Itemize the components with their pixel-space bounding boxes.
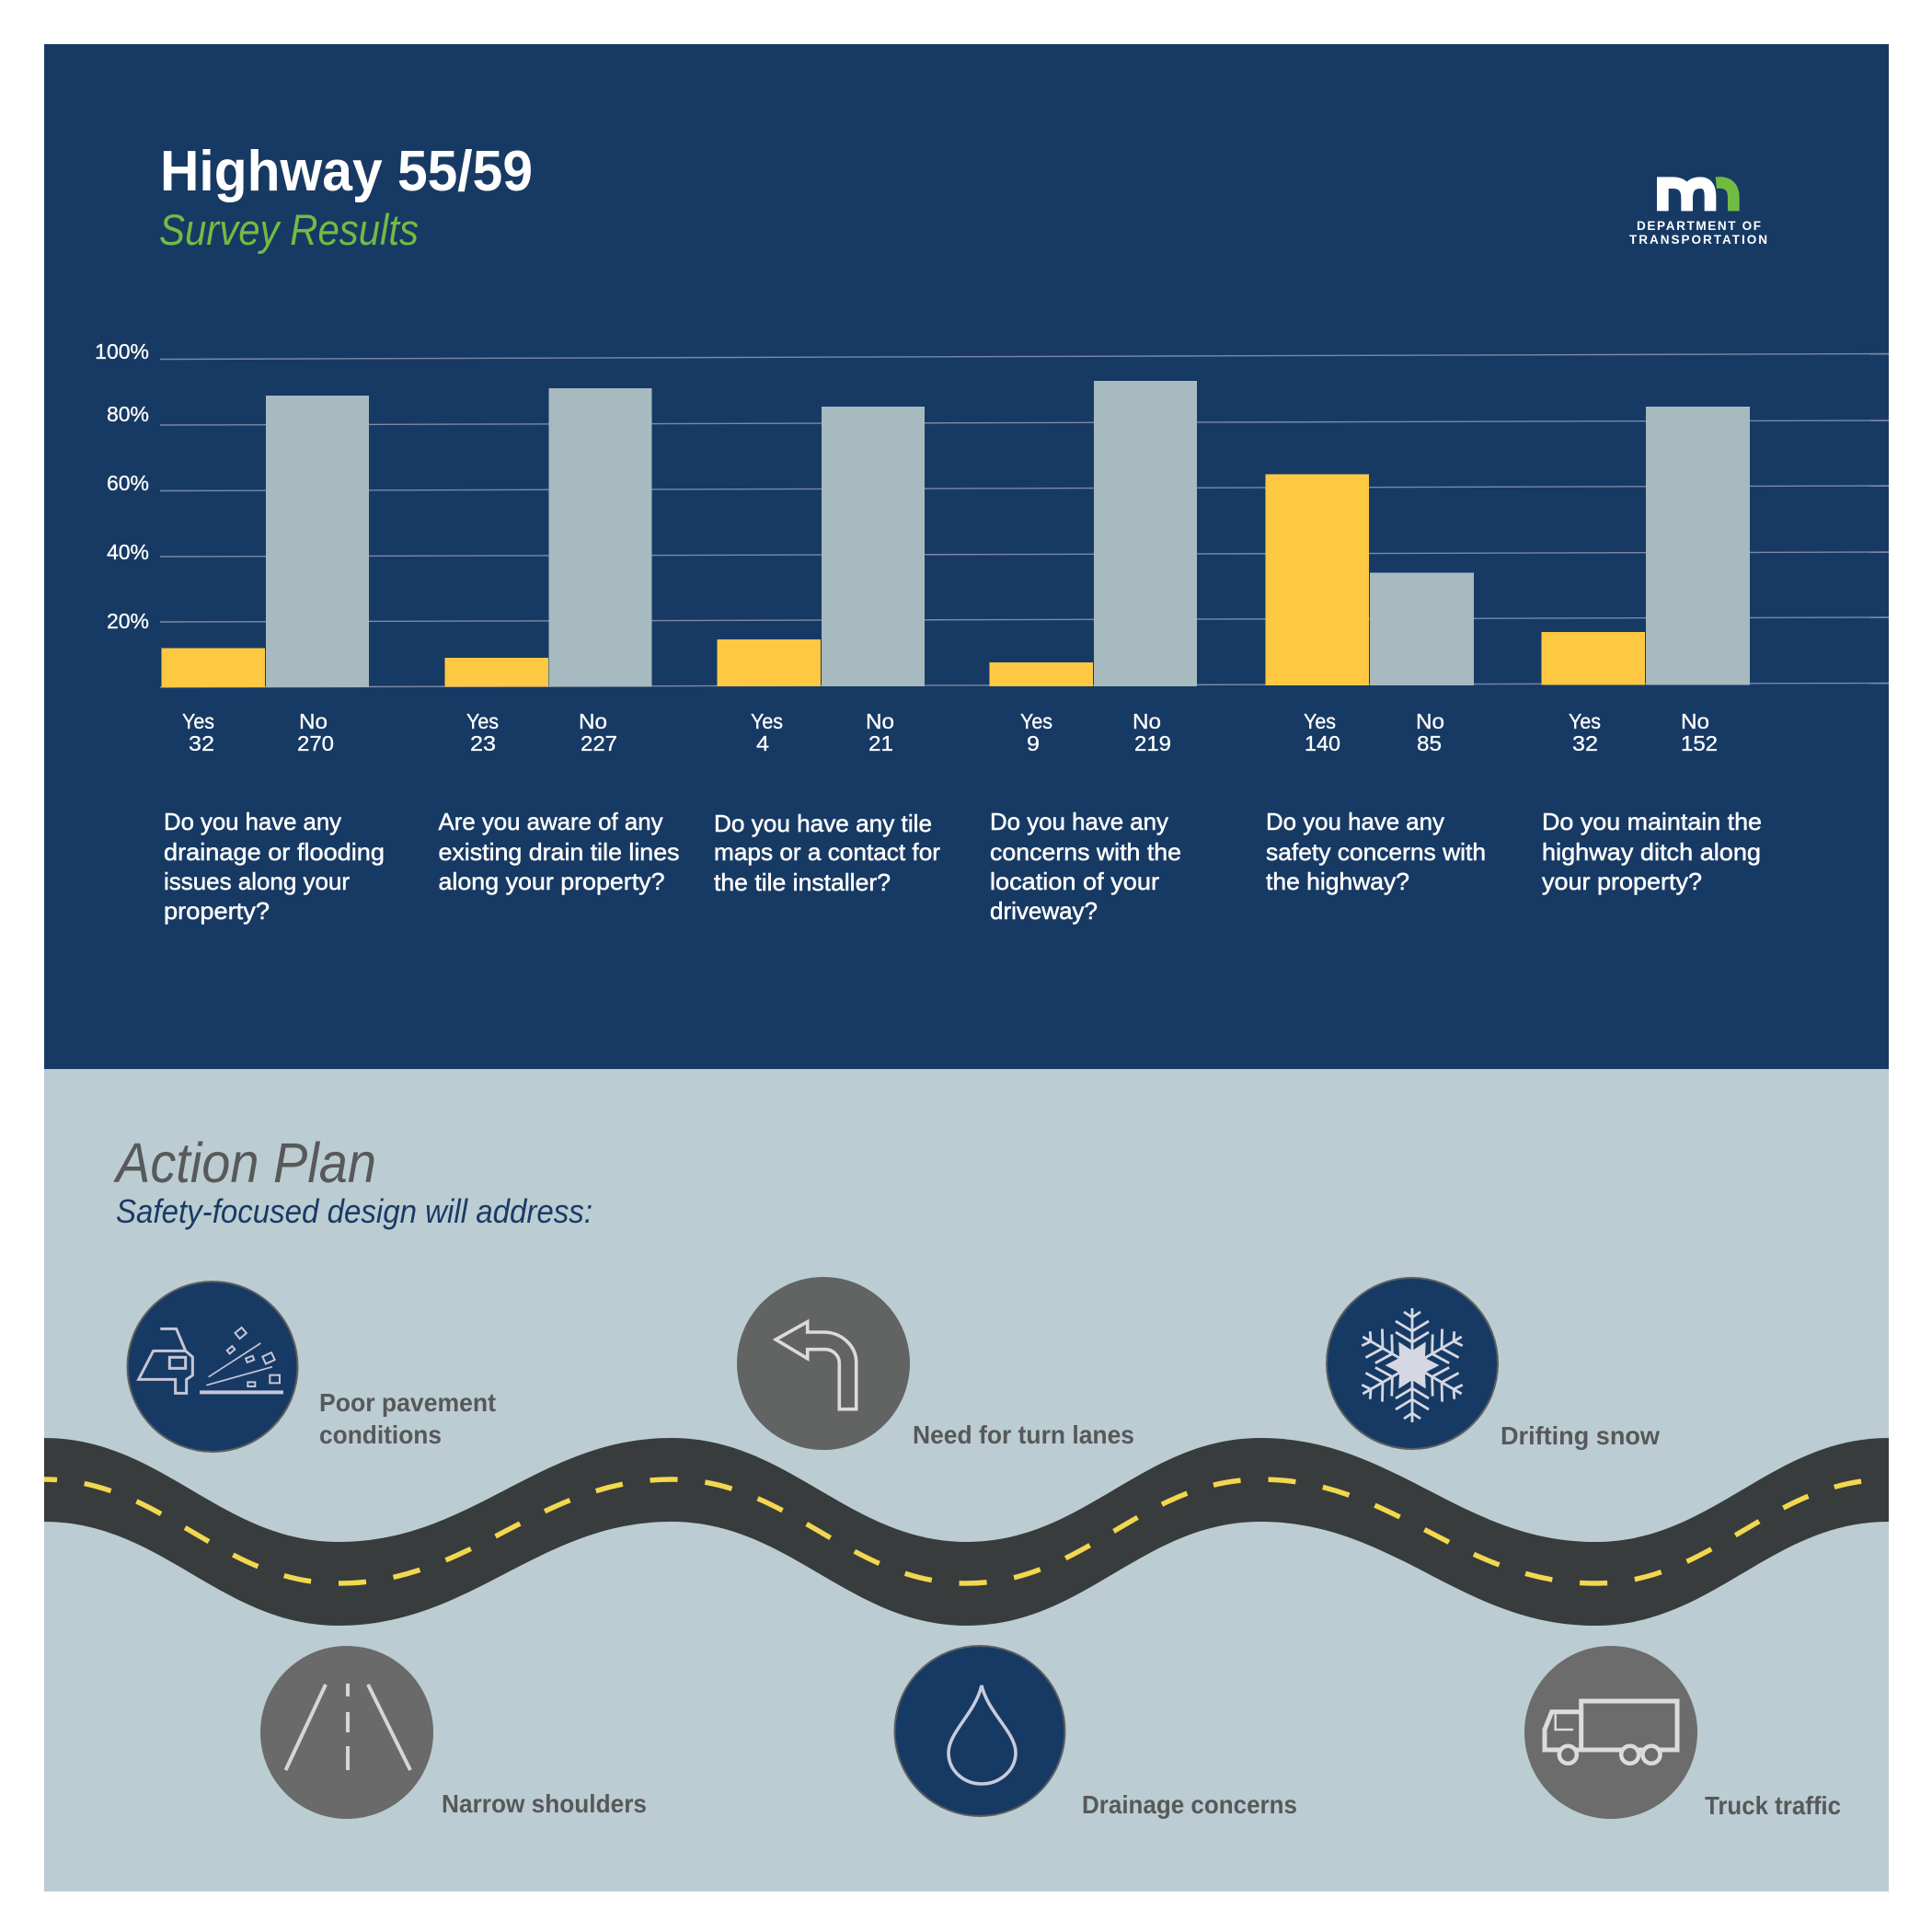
y axis labels	[95, 339, 149, 633]
bar chart	[160, 353, 1889, 687]
yes and no counts: Yes	[751, 709, 783, 733]
yes and no counts: 21	[868, 731, 893, 755]
label: truck traffic: Truck traffic	[1705, 1791, 1841, 1820]
label: poor pavement: Poor pavement	[319, 1388, 496, 1417]
question: driveway location: Do you have any	[990, 808, 1168, 835]
yes and no counts: No	[1416, 709, 1444, 733]
icon: narrow road	[260, 1646, 433, 1819]
yes and no counts: No	[299, 709, 328, 733]
label: drainage concerns: Drainage concerns	[1082, 1790, 1297, 1819]
y axis labels: 80%	[107, 402, 149, 426]
question: safety concerns: the highway?	[1266, 868, 1409, 895]
yes and no counts: 140	[1305, 731, 1340, 755]
panel: action plan	[44, 1069, 1889, 1892]
title: Highway 55/59	[160, 140, 533, 203]
label: drifting snow: Drifting snow	[1501, 1421, 1660, 1450]
logo: MnDOT	[1629, 182, 1767, 247]
icon: snowflake	[1327, 1278, 1498, 1449]
question: drain tile lines: along your property?	[438, 868, 664, 895]
question: drainage or flooding	[164, 808, 385, 925]
subtitle: Survey Results	[159, 205, 419, 254]
yes and no counts: 219	[1134, 731, 1171, 755]
question: drain tile lines: existing drain tile lines	[438, 838, 679, 866]
action plan heading: Action Plan	[112, 1132, 376, 1194]
yes and no counts: Yes	[1304, 709, 1336, 733]
yes and no counts: 9	[1027, 731, 1040, 755]
y axis labels: 60%	[107, 471, 149, 495]
yes and no counts: No	[866, 709, 894, 733]
icon: poor pavement	[127, 1282, 298, 1452]
bars: safety question	[1266, 475, 1474, 685]
label: turn lanes: Need for turn lanes	[913, 1420, 1134, 1449]
question: tile maps: maps or a contact for	[714, 838, 940, 866]
question: highway ditch: Do you maintain the	[1542, 808, 1762, 835]
question: safety concerns: safety concerns with	[1266, 838, 1486, 866]
logo: MnDOT: TRANSPORTATION	[1629, 233, 1767, 247]
yes and no counts: Yes	[182, 709, 214, 733]
icon: turn lane arrow	[737, 1277, 910, 1450]
yes and no counts: No	[1133, 709, 1161, 733]
y axis labels: 40%	[107, 540, 149, 564]
question: highway ditch: highway ditch along	[1542, 838, 1761, 866]
question: tile maps	[714, 810, 940, 896]
question: driveway location	[990, 808, 1181, 925]
winding road	[44, 1438, 1889, 1626]
question: drainage or flooding: property?	[164, 897, 270, 925]
yes and no counts: 4	[756, 731, 769, 755]
yes and no counts: 32	[1572, 731, 1598, 755]
question: driveway location: driveway?	[990, 897, 1098, 925]
question: highway ditch	[1542, 808, 1762, 895]
question: drainage or flooding: drainage or flooding	[164, 838, 385, 866]
y axis labels: 20%	[107, 609, 149, 633]
bars: driveway question	[990, 381, 1197, 686]
question: driveway location: location of your	[990, 868, 1159, 895]
bars: drain tile question	[445, 388, 651, 686]
question: highway ditch: your property?	[1542, 868, 1702, 895]
yes and no counts	[182, 709, 1718, 755]
question: tile maps: Do you have any tile	[714, 810, 932, 837]
yes and no counts: 152	[1681, 731, 1718, 755]
icon: truck	[1524, 1646, 1697, 1819]
yes and no counts: 270	[297, 731, 334, 755]
question: drainage or flooding: issues along your	[164, 868, 350, 895]
yes and no counts: No	[579, 709, 607, 733]
yes and no counts: Yes	[1569, 709, 1601, 733]
question: safety concerns: Do you have any	[1266, 808, 1444, 835]
bars: tile maps question	[718, 407, 925, 686]
yes and no counts: Yes	[466, 709, 499, 733]
question: driveway location: concerns with the	[990, 838, 1181, 866]
yes and no counts: 23	[470, 731, 496, 755]
label: poor pavement	[319, 1388, 496, 1449]
y axis labels: 100%	[95, 339, 149, 363]
survey panel background	[44, 44, 1889, 1069]
action plan background	[44, 1069, 1889, 1892]
question: drain tile lines	[438, 808, 679, 895]
action plan subheading: Safety-focused design will address:	[116, 1192, 592, 1230]
label: narrow shoulders: Narrow shoulders	[442, 1789, 647, 1818]
question: drainage or flooding: Do you have any	[164, 808, 341, 835]
question: safety concerns	[1266, 808, 1486, 895]
label: poor pavement: conditions	[319, 1420, 442, 1449]
logo: MnDOT: DEPARTMENT OF	[1637, 219, 1761, 233]
panel: survey results	[44, 44, 1889, 1069]
yes and no counts: 227	[581, 731, 617, 755]
icon: water drop	[894, 1646, 1065, 1816]
question: tile maps: the tile installer?	[714, 868, 891, 896]
yes and no counts: No	[1681, 709, 1709, 733]
bars: ditch question	[1542, 407, 1750, 684]
yes and no counts: 85	[1417, 731, 1442, 755]
yes and no counts: Yes	[1020, 709, 1052, 733]
yes and no counts: 32	[189, 731, 214, 755]
question: drain tile lines: Are you aware of any	[438, 808, 662, 835]
bars: drainage question	[162, 396, 369, 687]
